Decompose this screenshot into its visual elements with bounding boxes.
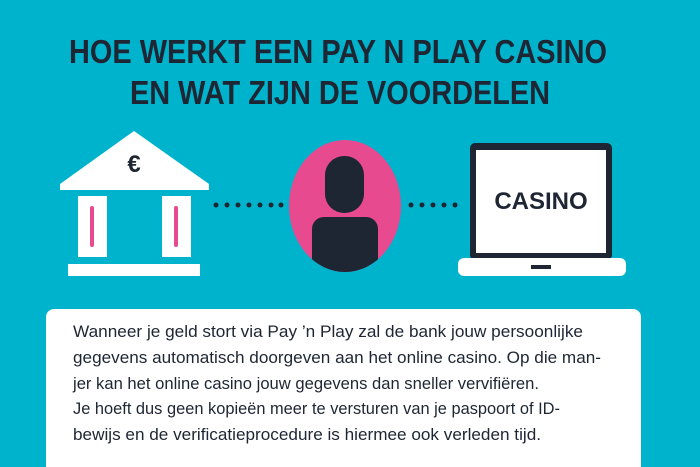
icon: laptop casino	[458, 143, 626, 276]
panel: text box	[46, 309, 641, 467]
arrow: dotted connector left	[214, 202, 284, 208]
text block: explanation: jer kan het online casino jouw gegevens dan sneller vervifiëren.	[72, 374, 539, 393]
icon: laptop casino: CASINO	[494, 188, 588, 215]
title: HOE WERKT EEN PAY N PLAY CASINO	[69, 33, 607, 70]
icon: person	[289, 140, 401, 272]
title: EN WAT ZIJN DE VOORDELEN	[130, 74, 550, 111]
text block: explanation: Wanneer je geld stort via Pay ’n Play zal de bank jouw persoonlijke	[73, 322, 583, 341]
text block: explanation: gegevens automatisch doorgeven aan het online casino. Op die man-	[73, 348, 601, 367]
text block: explanation: Je hoeft dus geen kopieën meer te versturen van je paspoort of ID-	[73, 399, 560, 418]
icon: bank: €	[127, 151, 141, 178]
icon: bank	[60, 131, 209, 276]
text block: explanation	[72, 322, 601, 444]
text block: explanation: bewijs en de verificatieprocedure is hiermee ook verleden tijd.	[73, 425, 541, 444]
arrow: dotted connector right	[408, 202, 458, 208]
title	[69, 33, 607, 111]
